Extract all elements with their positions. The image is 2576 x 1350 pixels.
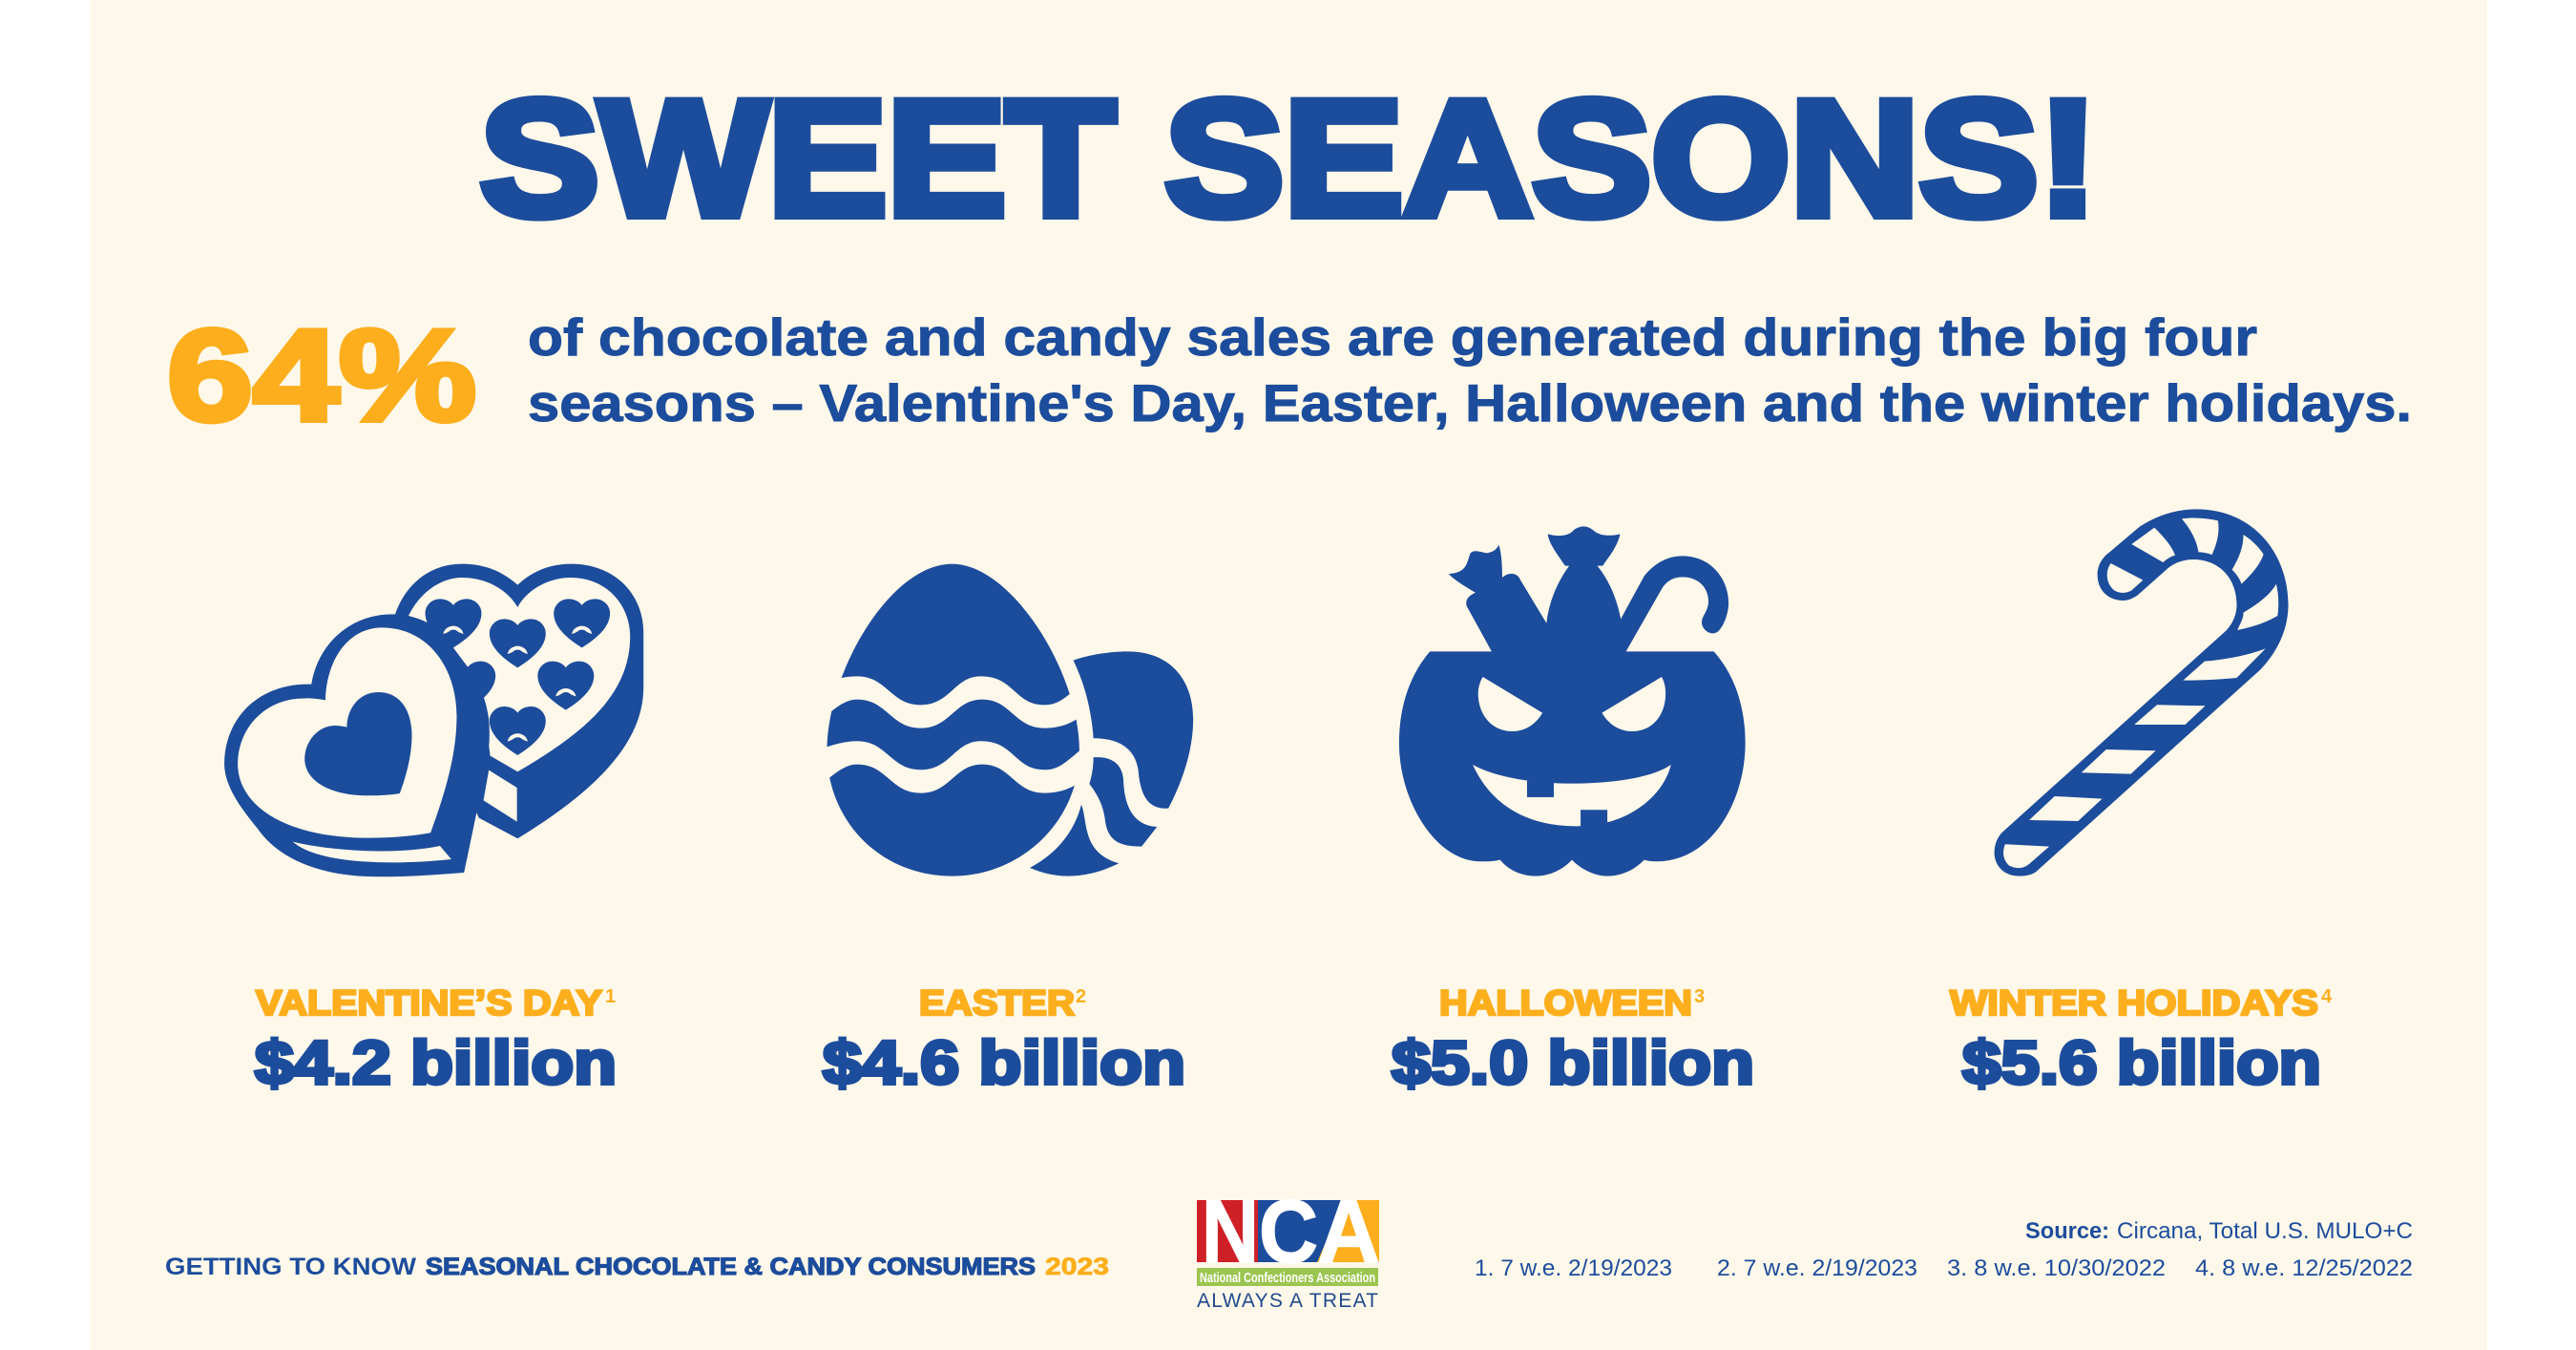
footnotes <box>1475 1255 2413 1281</box>
NCA logo: ALWAYS A TREAT <box>1197 1290 1378 1312</box>
icon: candy cane <box>1995 509 2289 876</box>
footnotes: 4. 8 w.e. 12/25/2022 <box>2195 1255 2413 1281</box>
intro text <box>528 307 2412 432</box>
stat: Valentine's Day: $4.2 billion <box>255 1028 617 1097</box>
intro text: of chocolate and candy sales are generated during the big four <box>528 307 2257 367</box>
stat: Easter: $4.6 billion <box>823 1028 1185 1097</box>
stat: Easter: 2 <box>1076 986 1086 1007</box>
stat: Winter Holidays: WINTER HOLIDAYS <box>1950 983 2318 1023</box>
NCA logo: C <box>1259 1181 1318 1281</box>
NCA logo: National Confectioners Association <box>1200 1270 1375 1286</box>
stat: Valentine's Day <box>255 983 617 1097</box>
stat: Halloween: 3 <box>1694 986 1705 1007</box>
title: SWEET SEASONS! <box>480 67 2098 250</box>
icon: jack-o-lantern with candy <box>1399 526 1746 876</box>
footnotes: 3. 8 w.e. 10/30/2022 <box>1947 1255 2166 1281</box>
icon: easter eggs <box>813 564 1193 876</box>
NCA logo: A <box>1317 1181 1380 1281</box>
statistic: 64%: 64% <box>167 303 476 448</box>
footer report title: SEASONAL CHOCOLATE & CANDY CONSUMERS <box>426 1254 1036 1280</box>
footer report title: GETTING TO KNOW <box>165 1254 416 1280</box>
icon: heart chocolate box <box>224 564 643 876</box>
NCA logo: N <box>1202 1181 1259 1281</box>
source line: Circana, Total U.S. MULO+C <box>2117 1218 2413 1244</box>
source line: Source: <box>2025 1218 2109 1244</box>
intro text: seasons – Valentine's Day, Easter, Halloween and the winter holidays. <box>528 373 2412 432</box>
stat: Valentine's Day: 1 <box>605 986 616 1007</box>
NCA logo <box>1197 1181 1380 1312</box>
stat: Halloween <box>1392 983 1754 1097</box>
footer report title <box>165 1254 1109 1280</box>
footnotes: 1. 7 w.e. 2/19/2023 <box>1475 1255 1672 1281</box>
stat: Halloween: HALLOWEEN <box>1439 983 1692 1023</box>
stat: Winter Holidays: 4 <box>2321 986 2333 1007</box>
stat: Easter: EASTER <box>919 983 1075 1023</box>
stat: Winter Holidays <box>1950 983 2333 1097</box>
stat: Easter <box>823 983 1185 1097</box>
footer report title: 2023 <box>1045 1254 1109 1280</box>
stat: Valentine's Day: VALENTINE’S DAY <box>256 983 602 1023</box>
stat: Halloween: $5.0 billion <box>1392 1028 1754 1097</box>
stat: Winter Holidays: $5.6 billion <box>1962 1028 2321 1097</box>
footnotes: 2. 7 w.e. 2/19/2023 <box>1717 1255 1917 1281</box>
